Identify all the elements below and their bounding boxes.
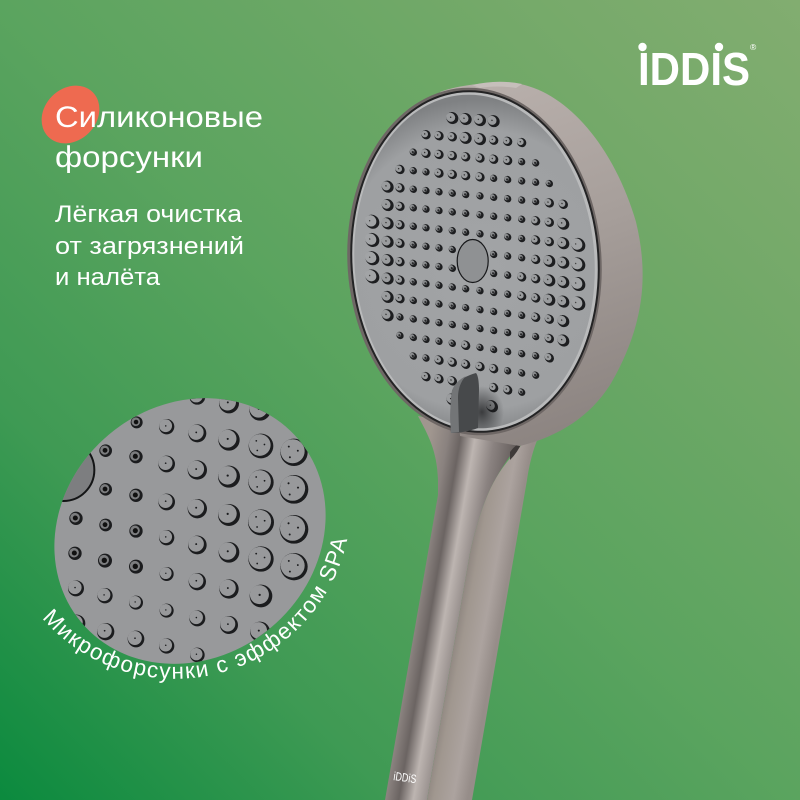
nozzle array [68,389,308,662]
title: Силиконовые [55,101,263,134]
accent blob [30,74,111,155]
description: от загрязнений [55,233,244,260]
curved caption: Микрофорсунки с эффектом SPA [43,539,348,683]
black ring [339,82,611,441]
light ring [341,84,609,439]
zoomed nozzle detail [54,398,326,664]
top detail [472,82,522,88]
center disc [457,240,488,282]
handle groove shadow [510,442,522,460]
logo: IDDIS: ® [750,42,757,52]
title: форсунки [55,141,203,174]
center disc arc [62,453,96,502]
handle left part [385,416,523,800]
head body [440,83,643,446]
title [55,101,263,174]
description: и налёта [55,264,161,291]
detail lens [0,343,380,719]
logo: IDDIS: IDDIS [638,43,750,95]
spray face [343,87,606,436]
nozzle grid [365,112,585,413]
description [55,201,244,291]
description: Лёгкая очистка [55,201,243,228]
shower head product [336,79,643,800]
head bezel [336,79,613,444]
shadow under switch [478,388,502,428]
handle right part [427,418,548,800]
handle logo: iDDiS [393,769,417,786]
mode switch [450,373,479,433]
